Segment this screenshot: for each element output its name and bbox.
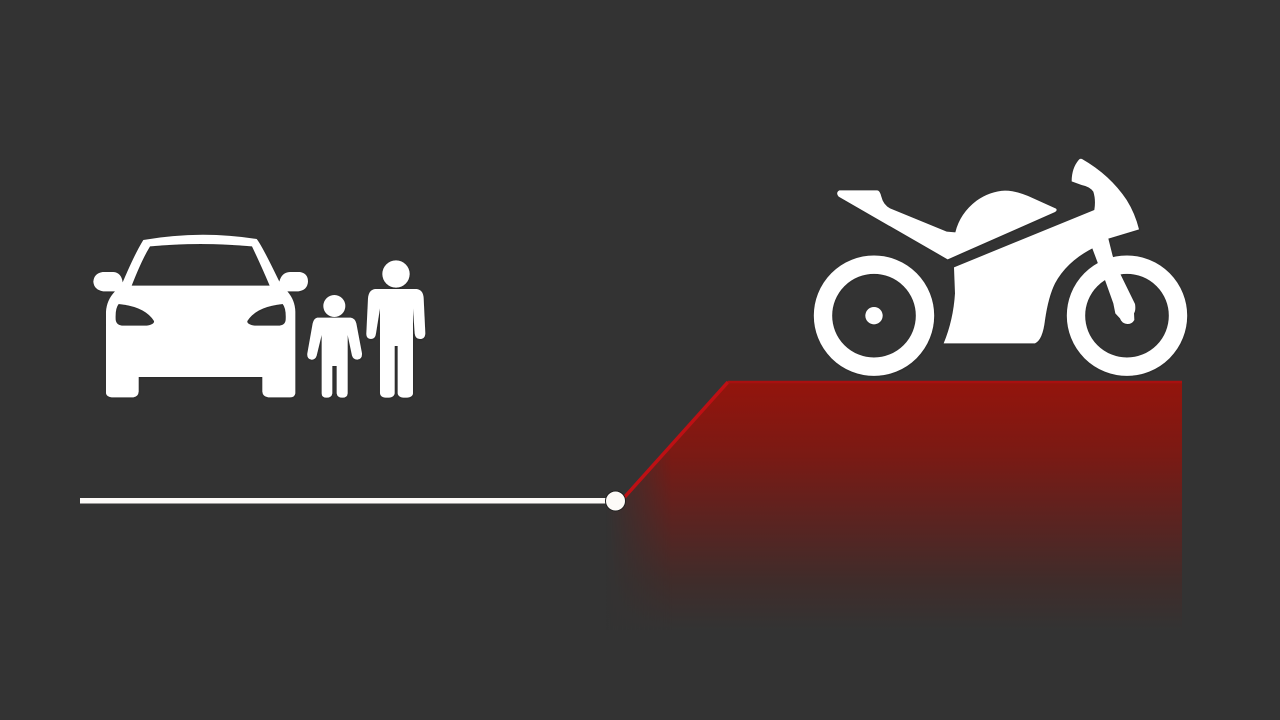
red risk area [620,380,1182,598]
infographic [80,158,1188,598]
icon: adult [366,260,425,398]
body and fairing [944,159,1139,343]
transition point marker [606,491,626,511]
icon: car [93,235,308,397]
icon: motorcycle [823,159,1178,367]
seat and tank [837,190,1057,259]
icon: child [307,295,362,398]
rear wheel [823,265,925,367]
front wheel [1076,265,1178,367]
baseline [80,498,616,504]
